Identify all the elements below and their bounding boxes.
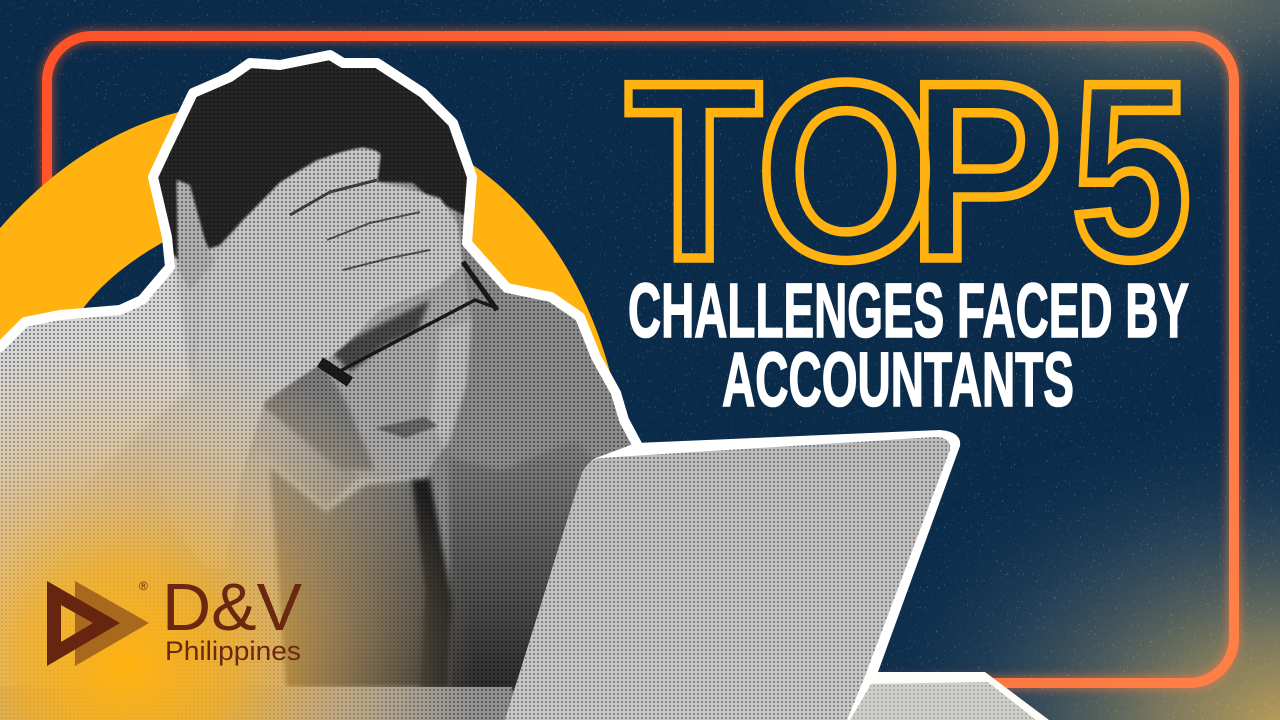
logo: D&V Philippines <box>47 570 302 666</box>
ear <box>177 180 215 290</box>
laptop screen back <box>505 430 960 720</box>
side of jacket <box>449 440 600 690</box>
title: TOP 5 outlined lettering <box>626 30 1191 312</box>
person with white sticker outline <box>0 0 660 720</box>
title: TOP 5 outlined lettering: 5 <box>1072 30 1191 312</box>
logo mark <box>47 581 149 666</box>
face <box>332 183 472 476</box>
dark chest and tie <box>270 467 449 687</box>
logo location: Philippines <box>165 636 301 666</box>
logo wordmark: D&V <box>162 570 302 645</box>
registered mark: ® <box>139 579 148 593</box>
table behind laptop <box>840 672 1049 720</box>
white sticker outline <box>0 55 640 450</box>
glasses <box>320 262 497 382</box>
halftone dots <box>1 61 630 719</box>
hair <box>158 60 467 262</box>
title: TOP 5 outlined lettering: P <box>909 31 1062 312</box>
title: TOP 5 outlined lettering: O <box>757 31 935 312</box>
amber wash <box>0 354 463 720</box>
jacket <box>0 146 632 720</box>
shirt <box>266 462 430 684</box>
subtitle <box>628 268 1189 423</box>
title: TOP 5 outlined lettering: T <box>626 31 761 312</box>
table strip <box>0 687 512 720</box>
yellow ring behind the person <box>0 102 612 600</box>
finger creases <box>290 180 430 270</box>
hand and forearm <box>198 146 462 532</box>
left sleeve light area <box>0 273 192 437</box>
